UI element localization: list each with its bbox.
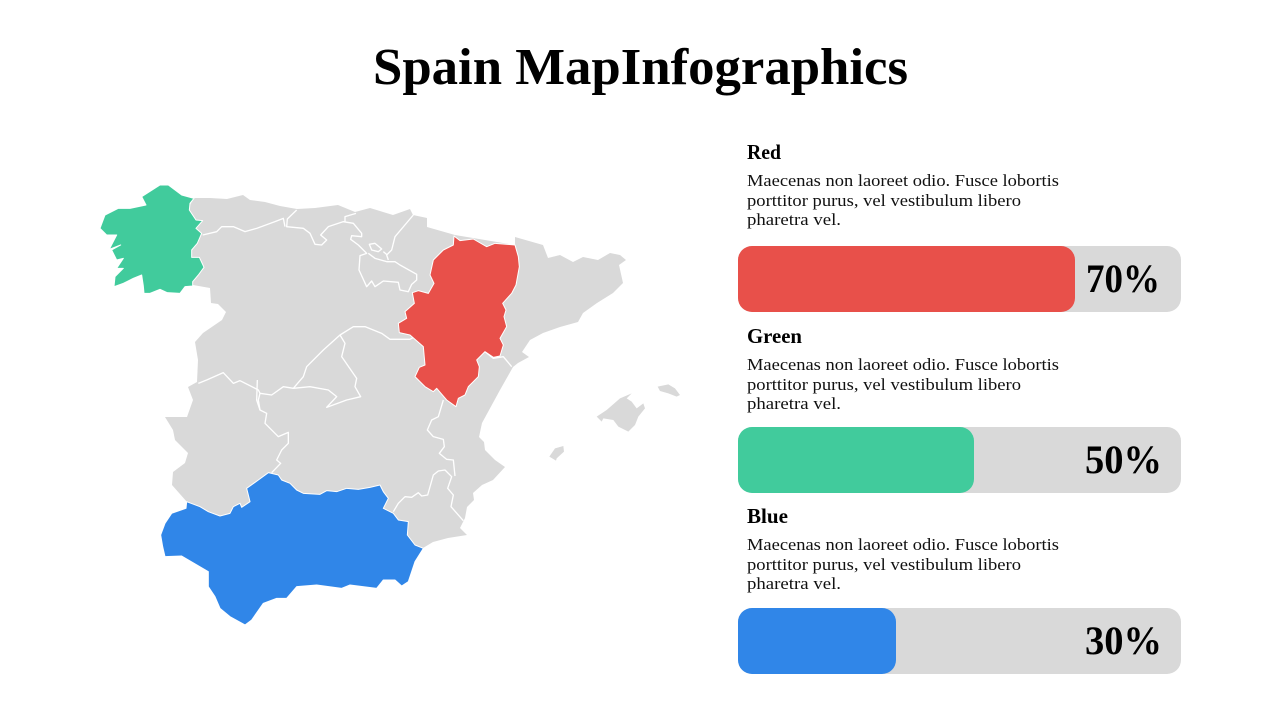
progress bar: Blue 30%: 30% [1085, 618, 1162, 663]
text block: Green description: porttitor purus, vel vestibulum libero [747, 375, 1021, 394]
text block: Blue description [747, 535, 1059, 593]
text block: Green description: Maecenas non laoreet odio. Fusce lobortis [747, 355, 1059, 374]
panel: Red [738, 140, 1181, 312]
map of Spain [100, 185, 680, 625]
heading: Blue: Blue [747, 504, 788, 528]
heading: Green: Green [747, 324, 802, 348]
progress bar: Green 50%: 50% [1085, 437, 1162, 482]
text block: Red description: porttitor purus, vel vestibulum libero [747, 191, 1021, 210]
region: Andalusia (blue) [161, 473, 423, 625]
text block: Red description [747, 171, 1059, 229]
title: Spain MapInfographics [373, 39, 908, 96]
progress bar: Green 50% [738, 427, 1181, 493]
region: Aragon (red) [398, 236, 519, 407]
text block: Green description [747, 355, 1059, 413]
text block: Red description: Maecenas non laoreet odio. Fusce lobortis [747, 171, 1059, 190]
island: Mallorca [597, 393, 645, 432]
region borders: Extremadura and Castilla-La Mancha [257, 380, 288, 473]
region: mainland Spain [165, 195, 626, 548]
panel: Green [738, 324, 1181, 493]
text block: Blue description: porttitor purus, vel vestibulum libero [747, 555, 1021, 574]
text block: Blue description: pharetra vel. [747, 574, 841, 593]
panel: Blue [738, 504, 1181, 674]
region: Balearic Islands [549, 384, 680, 461]
island: Menorca [658, 384, 680, 397]
progress bar: Red 70%: 70% [1086, 256, 1160, 301]
region: Galicia (green) [100, 185, 204, 293]
region borders: Cantabria, Basque Country, Navarra and La Rioja [287, 210, 417, 292]
progress bar: Red 70% [738, 246, 1181, 312]
region borders: Valencia and Murcia [393, 400, 463, 521]
island: Ibiza [549, 446, 564, 461]
region borders: Catalonia and Valencia [485, 352, 512, 367]
heading: Red: Red [747, 140, 781, 164]
region borders: west and centre [198, 218, 427, 410]
progress bar: Blue 30% [738, 608, 1181, 674]
text block: Green description: pharetra vel. [747, 394, 841, 413]
text block: Blue description: Maecenas non laoreet odio. Fusce lobortis [747, 535, 1059, 554]
text block: Red description: pharetra vel. [747, 210, 841, 229]
